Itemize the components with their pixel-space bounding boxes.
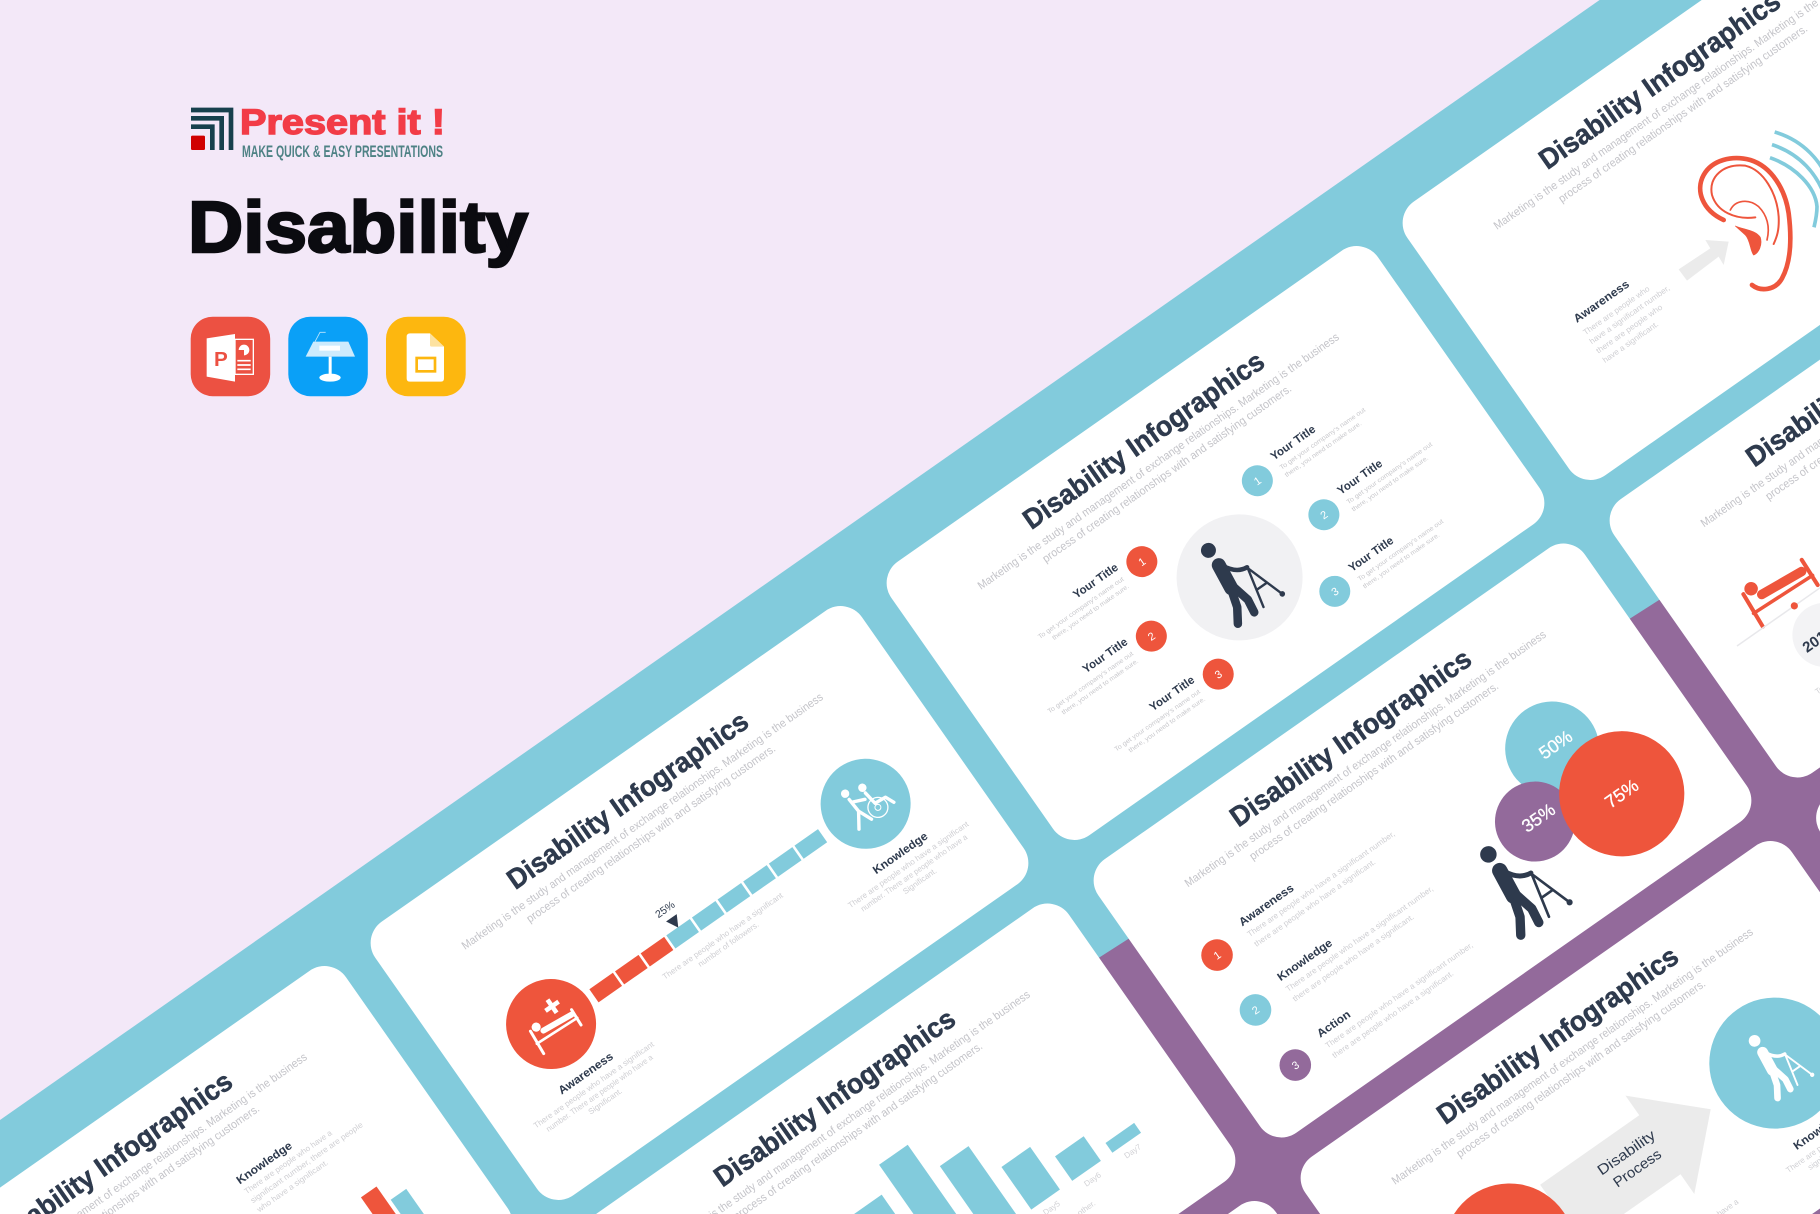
slide: progress bar bbox=[360, 596, 1039, 1210]
progress value: 25% bbox=[653, 899, 677, 921]
slide subtitle: process of creating relationships with and satisfying customers. bbox=[1248, 680, 1501, 863]
right item 3: there, you need to make sure. bbox=[1362, 532, 1441, 590]
left item 1: To get your company's name out bbox=[1037, 576, 1126, 641]
awareness description: have a significant number, bbox=[1588, 284, 1672, 346]
grey process arrow bbox=[1526, 1060, 1745, 1214]
right item 1: To get your company's name out bbox=[1279, 407, 1367, 472]
red bar bbox=[361, 1186, 440, 1214]
list item 1 bbox=[1194, 817, 1403, 979]
list item 1: There are people who have a significant number, bbox=[1246, 829, 1397, 939]
teal bar bbox=[391, 1189, 458, 1214]
icon: Google Slides bbox=[386, 317, 466, 396]
list item 1: 1 bbox=[1212, 949, 1224, 963]
right item 2: Your Title bbox=[1335, 458, 1385, 498]
slide subtitle: process of creating relationships with and satisfying customers. bbox=[1455, 978, 1708, 1160]
slide subtitle: Marketing is the study and management of exchange relationships. Marketing is the business bbox=[460, 691, 826, 952]
icon: ear with sound waves and arrow bbox=[1679, 132, 1820, 289]
slide: bar chart bbox=[567, 893, 1246, 1214]
brand tagline: MAKE QUICK & EASY PRESENTATIONS bbox=[242, 142, 443, 161]
awareness description: number. There are people who have a bbox=[545, 1053, 655, 1134]
bar chart bbox=[798, 1031, 1141, 1214]
right item 1: 1 bbox=[1252, 475, 1264, 488]
awareness description: Significant. bbox=[587, 1087, 624, 1116]
main title: Disability bbox=[188, 188, 528, 268]
timeline marker bbox=[1789, 601, 1799, 611]
red circle with bed icon bbox=[488, 961, 614, 1087]
logo: Present it bbox=[191, 103, 445, 161]
left item 3: there, you need to make sure. bbox=[1128, 696, 1207, 754]
slide title: Disability Infographics bbox=[1431, 940, 1684, 1130]
left item 2: there, you need to make sure. bbox=[1061, 658, 1140, 716]
slide subtitle: Marketing is the study and management of exchange relationships. Marketing is the business bbox=[1390, 926, 1756, 1187]
awareness label: Awareness bbox=[1572, 278, 1632, 325]
teal circle with wheelchair icon bbox=[803, 741, 928, 866]
left item 2 bbox=[1037, 614, 1173, 723]
list item 1: Awareness bbox=[1237, 882, 1296, 929]
slide subtitle: Marketing is the study and management of exchange relationships. Marketing is the business bbox=[976, 331, 1342, 592]
slide: bottom partial bbox=[774, 1191, 1453, 1214]
left item 3: 3 bbox=[1213, 668, 1225, 682]
list item 3: There are people who have a significant number, bbox=[1324, 941, 1475, 1050]
left item 1: there, you need to make sure. bbox=[1051, 583, 1131, 642]
right item 3: To get your company's name out bbox=[1357, 518, 1445, 583]
slide subtitle: process of creating relationships with and satisfying customers. bbox=[1041, 383, 1294, 565]
middle description: number of followers. bbox=[696, 920, 761, 969]
arrow label: Process bbox=[1611, 1147, 1665, 1191]
knowledge description: who have a significant. bbox=[254, 1158, 330, 1214]
knowledge description: significant number, there are people bbox=[249, 1120, 365, 1205]
right item 2: To get your company's name out bbox=[1345, 441, 1434, 506]
year badge bbox=[1780, 590, 1820, 679]
list item 2: there are people who have a significant. bbox=[1291, 912, 1416, 1003]
slide title: Disability Infographics bbox=[1017, 345, 1270, 535]
slide: process arrow bbox=[1290, 831, 1820, 1214]
left item 2: Your Title bbox=[1081, 636, 1130, 676]
icon: person with walker bbox=[1467, 823, 1574, 939]
bubble chart bbox=[1447, 656, 1709, 918]
knowledge description: Significant. bbox=[901, 866, 938, 896]
knowledge label: Knowledge bbox=[871, 830, 930, 877]
awareness description: There are people who bbox=[1581, 284, 1652, 337]
right item 1 bbox=[1235, 394, 1372, 503]
logo mark bbox=[191, 110, 231, 150]
middle description: There are people who have a significant bbox=[661, 890, 785, 981]
awareness description: There are people who have a significant bbox=[532, 1039, 656, 1130]
segmented progress bar bbox=[589, 829, 827, 1002]
purple slide band bbox=[800, 497, 1820, 1214]
icon: PowerPoint bbox=[191, 317, 270, 396]
slide title: Disability Infographics bbox=[708, 1003, 961, 1193]
right item 3: Your Title bbox=[1347, 535, 1396, 575]
list item 3: 3 bbox=[1290, 1059, 1302, 1073]
slide: knowledge bars (far left) bbox=[0, 956, 523, 1214]
grey circle bbox=[1152, 490, 1327, 665]
knowledge description: number. There are people who have a bbox=[859, 832, 970, 913]
left item 3 bbox=[1104, 652, 1240, 761]
bar labels: Day6 bbox=[1082, 1170, 1103, 1189]
slide: walker with numbered list bbox=[876, 236, 1555, 850]
list item 3: Action bbox=[1315, 1009, 1353, 1040]
teal circle with walking icon bbox=[1684, 972, 1820, 1154]
list item 1: there are people who have a significant. bbox=[1253, 857, 1377, 949]
right item 2: there, you need to make sure. bbox=[1351, 455, 1430, 513]
list item 3: there are people who have a significant. bbox=[1331, 969, 1455, 1060]
icon: person with walker bbox=[1189, 522, 1286, 627]
slide subtitle: Marketing is the study and management of exchange relationships. Marketing is the business bbox=[1183, 629, 1549, 890]
left item 3: To get your company's name out bbox=[1113, 688, 1202, 753]
awareness label: Awareness bbox=[556, 1051, 616, 1097]
arrow label: Disability bbox=[1595, 1127, 1660, 1179]
red circle bbox=[1418, 1158, 1601, 1214]
slide: lower right partial bbox=[1806, 471, 1820, 1085]
list item 2: There are people who have a significant number, bbox=[1284, 884, 1435, 994]
right item 1: Your Title bbox=[1269, 423, 1318, 463]
left item 1 bbox=[1028, 540, 1164, 648]
list item 2: 2 bbox=[1250, 1004, 1262, 1017]
bar labels: Day7 bbox=[1122, 1142, 1143, 1160]
knowledge description: There are people who have a bbox=[243, 1128, 334, 1196]
icon: Keynote bbox=[288, 317, 368, 396]
slide title: Disability Infographics bbox=[1224, 643, 1477, 833]
slide: percentage bubbles bbox=[1083, 533, 1762, 1148]
left item 1: 1 bbox=[1136, 556, 1148, 569]
awareness description: have a significant. bbox=[1601, 320, 1660, 365]
right item 1: there, you need to make sure. bbox=[1284, 420, 1363, 479]
list item 2: Knowledge bbox=[1275, 937, 1335, 984]
right item 2 bbox=[1302, 428, 1439, 537]
slide: timeline with bed bbox=[1599, 173, 1820, 788]
slide: ear bbox=[1392, 0, 1820, 490]
bubble chart: 50% bbox=[1535, 726, 1576, 763]
left item 2: 2 bbox=[1146, 630, 1158, 644]
knowledge label: Knowledge bbox=[235, 1140, 295, 1187]
list item 2 bbox=[1232, 872, 1442, 1034]
bubble chart: 75% bbox=[1601, 775, 1642, 812]
right item 2: 2 bbox=[1319, 509, 1330, 522]
slide subtitle: process of creating relationships with and satisfying customers. bbox=[525, 743, 778, 925]
icon: bed bbox=[1737, 550, 1820, 627]
left item 3: Your Title bbox=[1148, 674, 1197, 714]
knowledge description: There are people who have a significant bbox=[846, 819, 971, 910]
list item 3 bbox=[1273, 928, 1482, 1090]
awareness description: there are people who bbox=[1594, 302, 1665, 355]
right item 3 bbox=[1313, 505, 1450, 614]
slide title: Disability Infographics bbox=[501, 705, 754, 895]
left item 2: To get your company's name out bbox=[1046, 650, 1135, 715]
brand name: Present it ! bbox=[240, 103, 445, 142]
timeline bbox=[1737, 566, 1820, 646]
progress marker bbox=[666, 914, 684, 931]
slide subtitle: process of creating relationships with and satisfying customers. bbox=[1557, 23, 1810, 205]
icon: PowerPoint: P bbox=[214, 348, 228, 371]
left item 1: Your Title bbox=[1071, 562, 1121, 601]
right item 3: 3 bbox=[1329, 585, 1341, 599]
bubble chart: 35% bbox=[1518, 799, 1559, 836]
